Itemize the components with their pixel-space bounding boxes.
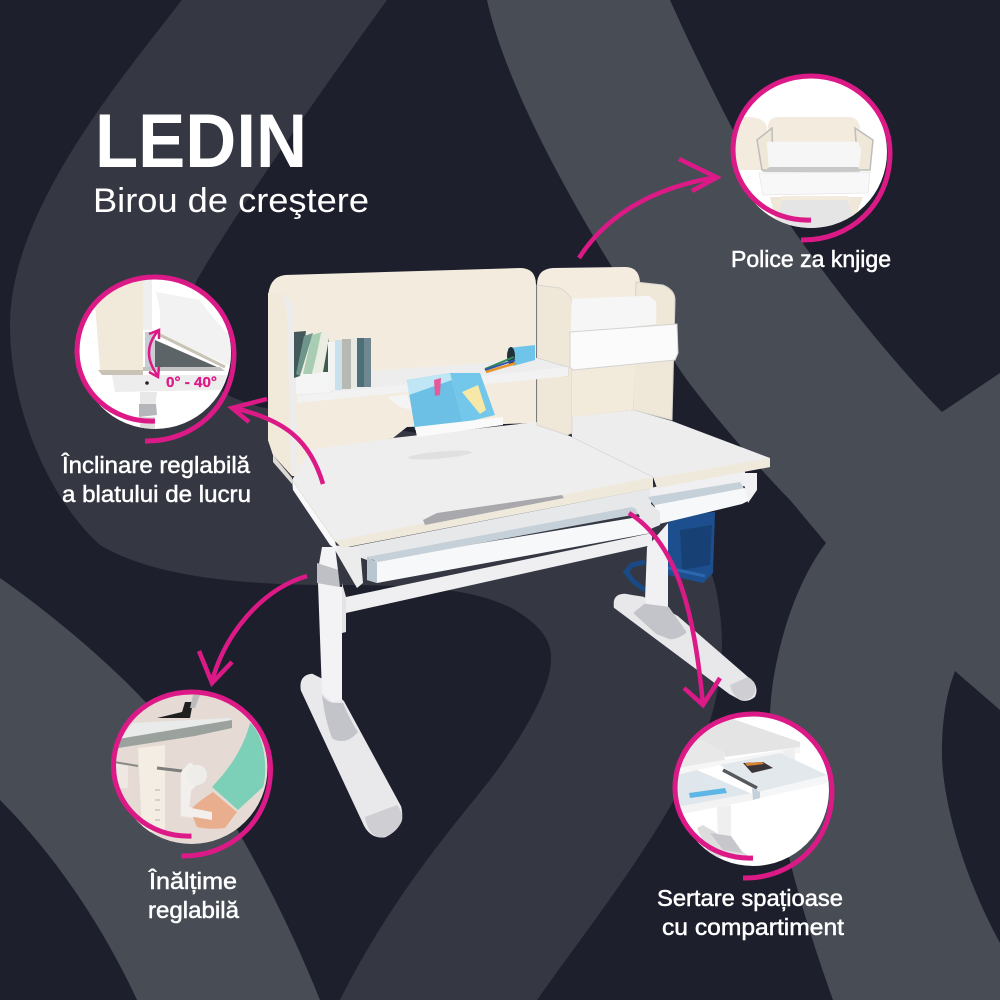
shelf: [297, 357, 568, 403]
shelf front: [297, 367, 568, 403]
right leg and foot: [615, 523, 755, 700]
panel: height inset: [114, 692, 270, 856]
middle upright: [537, 285, 572, 435]
label: drawers: Sertare spațioase: [657, 885, 843, 911]
label: drawers: cu compartiment: [662, 914, 845, 940]
crossbar: [346, 533, 652, 613]
ring: [77, 277, 234, 441]
label: drawers: [657, 885, 845, 940]
desk illustration: [268, 267, 770, 837]
inset photo: shelves: [735, 117, 873, 228]
panel: drawers inset: [675, 714, 832, 878]
inset photo: height crank: [114, 695, 265, 832]
hutch right back panel: [537, 267, 640, 425]
pencil cup: [485, 345, 535, 372]
ring: [114, 692, 270, 856]
panel: tilt inset: [77, 270, 234, 441]
inset photo: tilt: [95, 270, 233, 432]
pen grip strip: [423, 495, 564, 525]
organizer white panels: [570, 297, 678, 417]
label: shelves: Police za knjige: [731, 246, 891, 272]
ring: [675, 714, 832, 878]
desk recess shadow: [408, 449, 472, 461]
book on holder: [387, 373, 503, 437]
label: height: Înălțime: [148, 868, 237, 894]
hutch left side strip: [268, 293, 298, 473]
label: tilt: a blatului de lucru: [62, 481, 251, 507]
backpack: [626, 512, 715, 590]
left leg and foot: [302, 547, 402, 837]
books: [294, 331, 371, 394]
left drawer: [332, 507, 651, 588]
desktop right: [570, 410, 770, 488]
icon: tilt arrow: [149, 330, 159, 377]
panel: shelves inset: [733, 76, 890, 240]
right drawer: [636, 473, 757, 530]
arrow: to drawers: [629, 513, 720, 705]
tilt angle text: 0° - 40°: [166, 374, 217, 391]
hutch main back: [268, 268, 536, 476]
label: height: [148, 868, 239, 923]
arrow: to height: [199, 576, 307, 683]
arrow: to shelves: [579, 159, 717, 258]
under-desk box: [345, 488, 653, 560]
hutch right side panel: [633, 282, 675, 420]
desktop left: [292, 422, 653, 548]
arrow: to tilt: [232, 399, 323, 484]
label: tilt: [61, 452, 251, 507]
label: height: reglabilă: [148, 897, 239, 923]
ring: [733, 76, 890, 240]
title: LEDIN: [95, 99, 307, 184]
label: tilt: Înclinare reglabilă: [61, 452, 250, 478]
inset photo: drawers: [677, 718, 827, 857]
subtitle: Birou de creştere: [93, 182, 369, 220]
